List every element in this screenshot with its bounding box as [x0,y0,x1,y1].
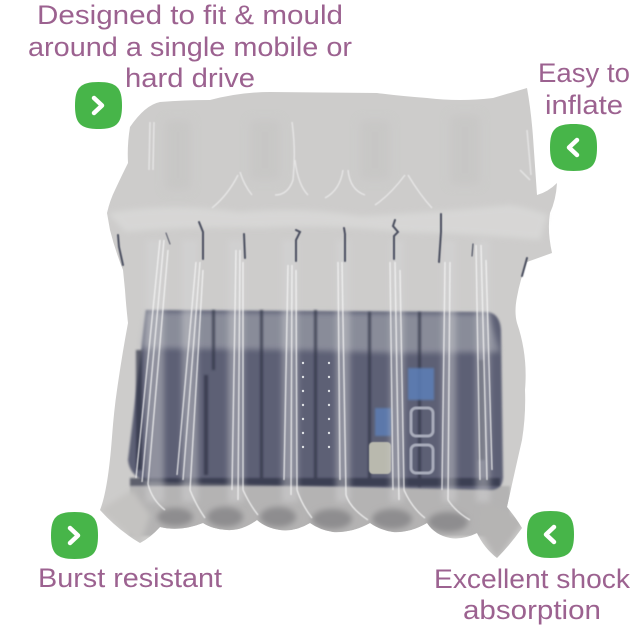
phone dotted light line [302,362,330,448]
phone under the film [128,310,503,490]
top chamber creases [149,122,531,208]
heading: Designed to fit & mould around a single mobile or hard drive: Designed to fit & mould [37,0,343,30]
heading: Easy to inflate [538,58,630,120]
heading: Designed to fit & mould around a single mobile or hard drive [28,0,352,93]
column highlights [136,240,492,520]
heading: Easy to inflate: inflate [545,90,623,120]
seal marks [118,214,527,276]
heading: Designed to fit & mould around a single mobile or hard drive: hard drive [125,63,255,93]
heading: Excellent shock absorption [434,564,631,625]
heading: Excellent shock absorption: Excellent shock [434,564,631,594]
icon: green right chevron top [75,82,122,129]
phone upper glare [140,312,500,353]
bag body [100,88,557,558]
film column shading [146,240,490,502]
phone app icons [369,368,434,474]
heading: Burst resistant: Burst resistant [38,563,223,593]
phone dark gaps between columns [130,310,500,487]
icon: green right chevron bottom [51,512,98,559]
bottom column ends [130,486,510,536]
icon: green left chevron top [550,124,597,171]
heading: Designed to fit & mould around a single mobile or hard drive: around a single mobile or [28,32,352,62]
bottom corner film [106,492,149,542]
top chamber soft folds [165,115,480,190]
heading: Excellent shock absorption: absorption [463,595,601,625]
crimped band with seal marks [108,205,548,240]
illustration: air column bag holding a phone [100,88,557,560]
heading: Easy to inflate: Easy to [538,58,630,88]
icon: green left chevron bottom [527,511,574,558]
